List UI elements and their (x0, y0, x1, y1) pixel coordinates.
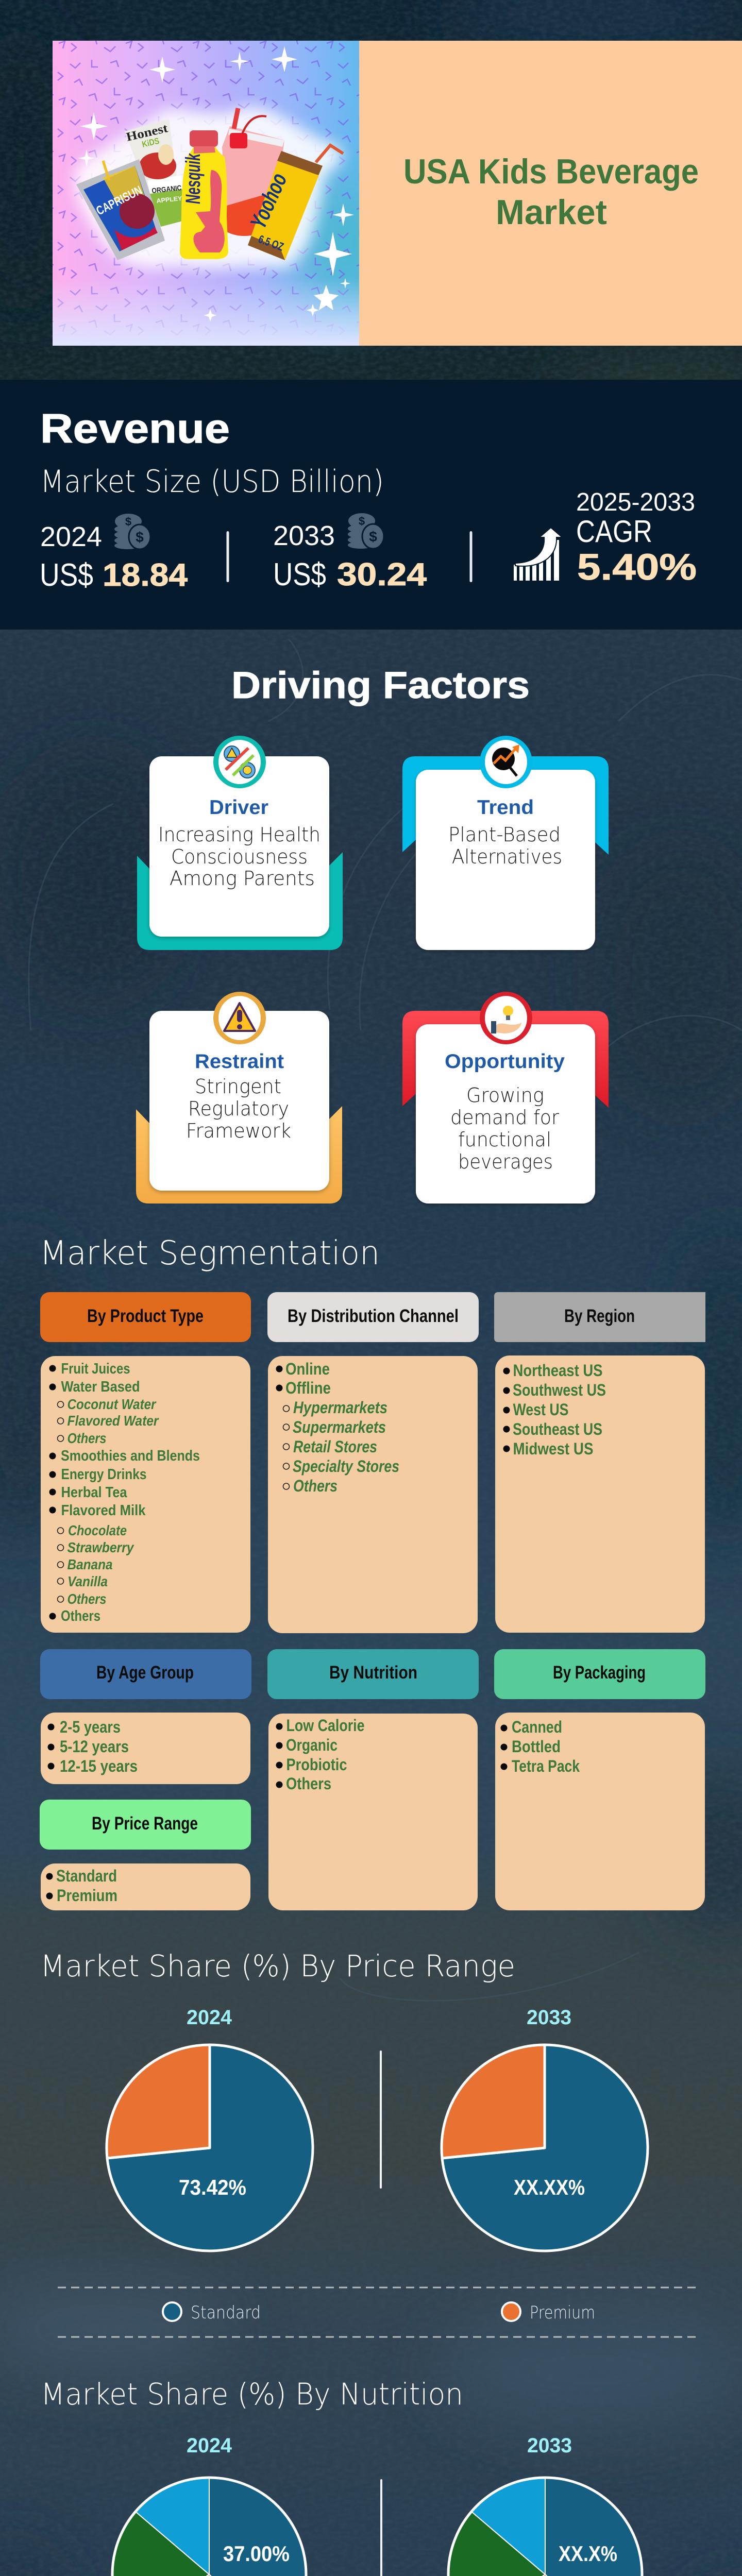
price range list (46, 1867, 117, 1905)
hero title panel (359, 41, 742, 346)
region list: Northeast US (513, 1361, 603, 1380)
packaging list: Bottled (512, 1737, 561, 1756)
panel: by region (494, 1292, 705, 1633)
panel: driver (137, 736, 343, 950)
pie chart: price range 2033 (442, 2045, 648, 2251)
price range list: Premium (57, 1886, 117, 1905)
driving factors heading: Driving Factors (231, 665, 530, 706)
revenue 2033: 30.24 (337, 557, 427, 592)
panel: restraint: Regulatory (188, 1097, 289, 1120)
honest kids juice box: APPLEY (156, 195, 182, 205)
panel: opportunity (402, 992, 609, 1204)
distribution channel list: Specialty Stores (293, 1457, 399, 1476)
white glow behind products (75, 107, 342, 269)
pie chart: nutrition 2033 (448, 2478, 642, 2576)
icon: growth chart (514, 528, 562, 581)
icon: coins: $ (125, 515, 131, 528)
panel: restraint: Restraint (195, 1050, 284, 1073)
cagr (576, 488, 697, 588)
distribution channel list: Retail Stores (293, 1437, 377, 1456)
revenue 2024: 2024 (40, 521, 102, 552)
panel: by product type (40, 1292, 251, 1633)
panel: by distribution channel (267, 1292, 479, 1633)
market size subheading: Market Size (USD Billion) (40, 464, 384, 500)
nutrition 2033 label: 2033 (527, 2434, 572, 2457)
age group list: 12-15 years (60, 1757, 138, 1775)
panel: by age group (40, 1649, 251, 1784)
cagr: 5.40% (577, 547, 697, 588)
product type list: Banana (67, 1556, 112, 1572)
revenue 2033: 2033 (273, 520, 335, 551)
yoohoo box: 6.5 OZ (257, 232, 285, 253)
panel: driver: Increasing Health (158, 823, 321, 846)
distribution channel list: Online (285, 1360, 330, 1378)
product type list: Energy Drinks (61, 1466, 146, 1483)
product type list: Chocolate (68, 1522, 127, 1538)
market share by price range heading: Market Share (%) By Price Range (40, 1948, 515, 1984)
panel: by product type: By Product Type (87, 1306, 204, 1326)
panel: opportunity: Opportunity (445, 1050, 565, 1073)
icon: driver (224, 746, 255, 778)
price range 2024 label: 2024 (187, 2006, 232, 2029)
age group list: 2-5 years (60, 1718, 121, 1736)
product type list: Flavored Water (67, 1413, 159, 1429)
age group list: 5-12 years (60, 1737, 129, 1756)
honest kids juice box (125, 119, 182, 227)
cagr: CAGR (576, 514, 652, 549)
pie chart: price range 2024 (107, 2045, 313, 2251)
panel: opportunity: functional (458, 1128, 551, 1151)
product type list: Coconut Water (67, 1396, 157, 1412)
packaging list: Tetra Pack (512, 1757, 580, 1775)
honest kids juice box: KiDS (141, 136, 160, 149)
cocktail glass (222, 108, 284, 236)
nesquik bottle (180, 130, 228, 259)
panel: by price range: By Price Range (92, 1814, 198, 1834)
product type list: Flavored Milk (61, 1502, 146, 1519)
capri sun pouch (76, 159, 165, 260)
yoohoo box: Yoohoo (245, 170, 292, 232)
pie chart: price range 2033: XX.XX% (514, 2175, 585, 2199)
panel: by packaging (494, 1649, 705, 1910)
panel: by nutrition (267, 1649, 479, 1910)
product type list: Others (61, 1608, 100, 1624)
panel: trend: Alternatives (452, 845, 562, 868)
product type list: Strawberry (67, 1539, 134, 1555)
nutrition list: Organic (286, 1736, 338, 1754)
product type list: Others (67, 1430, 106, 1446)
product type list: Vanilla (68, 1573, 108, 1589)
price range 2033 label: 2033 (527, 2006, 571, 2029)
panel: restraint: Framework (186, 1120, 291, 1142)
revenue 2024 (40, 514, 188, 593)
hero title panel: USA Kids Beverage (403, 152, 699, 191)
icon: warning (224, 1003, 255, 1031)
panel: by nutrition: By Nutrition (329, 1663, 417, 1683)
nutrition list: Low Calorie (286, 1716, 365, 1735)
region list (503, 1361, 606, 1458)
hero banner (53, 41, 742, 346)
distribution channel list: Others (293, 1477, 338, 1495)
nutrition list: Probiotic (286, 1755, 347, 1774)
region list: West US (513, 1400, 569, 1419)
honest kids juice box: ORGANIC (151, 183, 182, 195)
panel: trend: Trend (477, 796, 534, 819)
product type list (49, 1361, 200, 1624)
revenue 2033: US$ (273, 557, 326, 592)
panel: driver: Among Parents (170, 867, 315, 890)
market share by nutrition heading: Market Share (%) By Nutrition (41, 2377, 463, 2412)
panel: opportunity: beverages (458, 1150, 553, 1173)
legend: price range: Premium (530, 2302, 595, 2323)
pie chart: price range 2024: 73.42% (179, 2175, 246, 2199)
capri sun pouch: CAPRISUN (94, 183, 144, 218)
icon: coins: $ (369, 529, 377, 545)
yoohoo box (245, 145, 343, 260)
packaging list: Canned (512, 1718, 562, 1736)
panel: trend: Plant-Based (448, 823, 561, 846)
icon: coins: $ (359, 515, 365, 528)
panel: restraint (136, 992, 342, 1204)
market segmentation heading: Market Segmentation (40, 1234, 380, 1273)
nutrition list: Others (286, 1774, 331, 1793)
honest kids juice box: Honest (125, 122, 169, 144)
panel: restraint: Stringent (195, 1075, 281, 1098)
region list: Southwest US (513, 1381, 606, 1399)
panel: by age group: By Age Group (96, 1663, 194, 1683)
product type list: Smoothies and Blends (61, 1448, 200, 1464)
panel: driver: Consciousness (171, 845, 308, 868)
nesquik bottle: Nesquik (182, 153, 205, 204)
age group list (47, 1718, 138, 1775)
pie chart: nutrition 2024 (112, 2478, 306, 2576)
revenue band (0, 380, 742, 630)
hero title panel: Market (496, 193, 607, 232)
product type list: Others (67, 1591, 106, 1607)
packaging list (501, 1718, 580, 1775)
price range list: Standard (56, 1867, 117, 1885)
distribution channel list: Offline (285, 1379, 331, 1397)
icon: coins: $ (136, 529, 144, 545)
icon: idea in hand (491, 1006, 521, 1033)
panel: opportunity: Growing (466, 1084, 544, 1107)
distribution channel list: Supermarkets (293, 1418, 386, 1436)
product type list: Herbal Tea (61, 1484, 127, 1501)
panel: by price range (40, 1800, 251, 1910)
revenue 2024: US$ (40, 557, 93, 593)
product type list: Fruit Juices (61, 1361, 130, 1377)
region list: Midwest US (513, 1439, 594, 1458)
icon: coins (348, 513, 384, 549)
pie chart: nutrition 2024: 37.00% (223, 2541, 290, 2566)
panel: by region: By Region (564, 1306, 635, 1326)
nutrition list (276, 1716, 365, 1793)
hero collage image: kids beverages (53, 41, 376, 346)
region list: Southeast US (513, 1420, 602, 1438)
legend: price range: Standard (191, 2302, 261, 2323)
sparkles (78, 46, 354, 321)
panel: opportunity: demand for (450, 1106, 559, 1129)
revenue 2033 (273, 513, 427, 592)
product type list: Water Based (61, 1379, 140, 1395)
distribution channel list (276, 1360, 399, 1495)
panel: trend (402, 736, 609, 950)
cagr: 2025-2033 (576, 488, 695, 516)
pie chart: nutrition 2033: XX.X% (559, 2541, 617, 2566)
legend: price range (58, 2287, 700, 2337)
revenue 2024: 18.84 (103, 557, 188, 593)
revenue heading: Revenue (40, 405, 230, 451)
panel: by packaging: By Packaging (553, 1663, 646, 1683)
panel: by distribution channel: By Distribution Channel (288, 1306, 459, 1326)
distribution channel list: Hypermarkets (293, 1398, 387, 1417)
icon: coins (114, 514, 150, 549)
nutrition 2024 label: 2024 (187, 2434, 232, 2457)
panel: driver: Driver (209, 796, 268, 819)
icon: trend (492, 744, 519, 776)
